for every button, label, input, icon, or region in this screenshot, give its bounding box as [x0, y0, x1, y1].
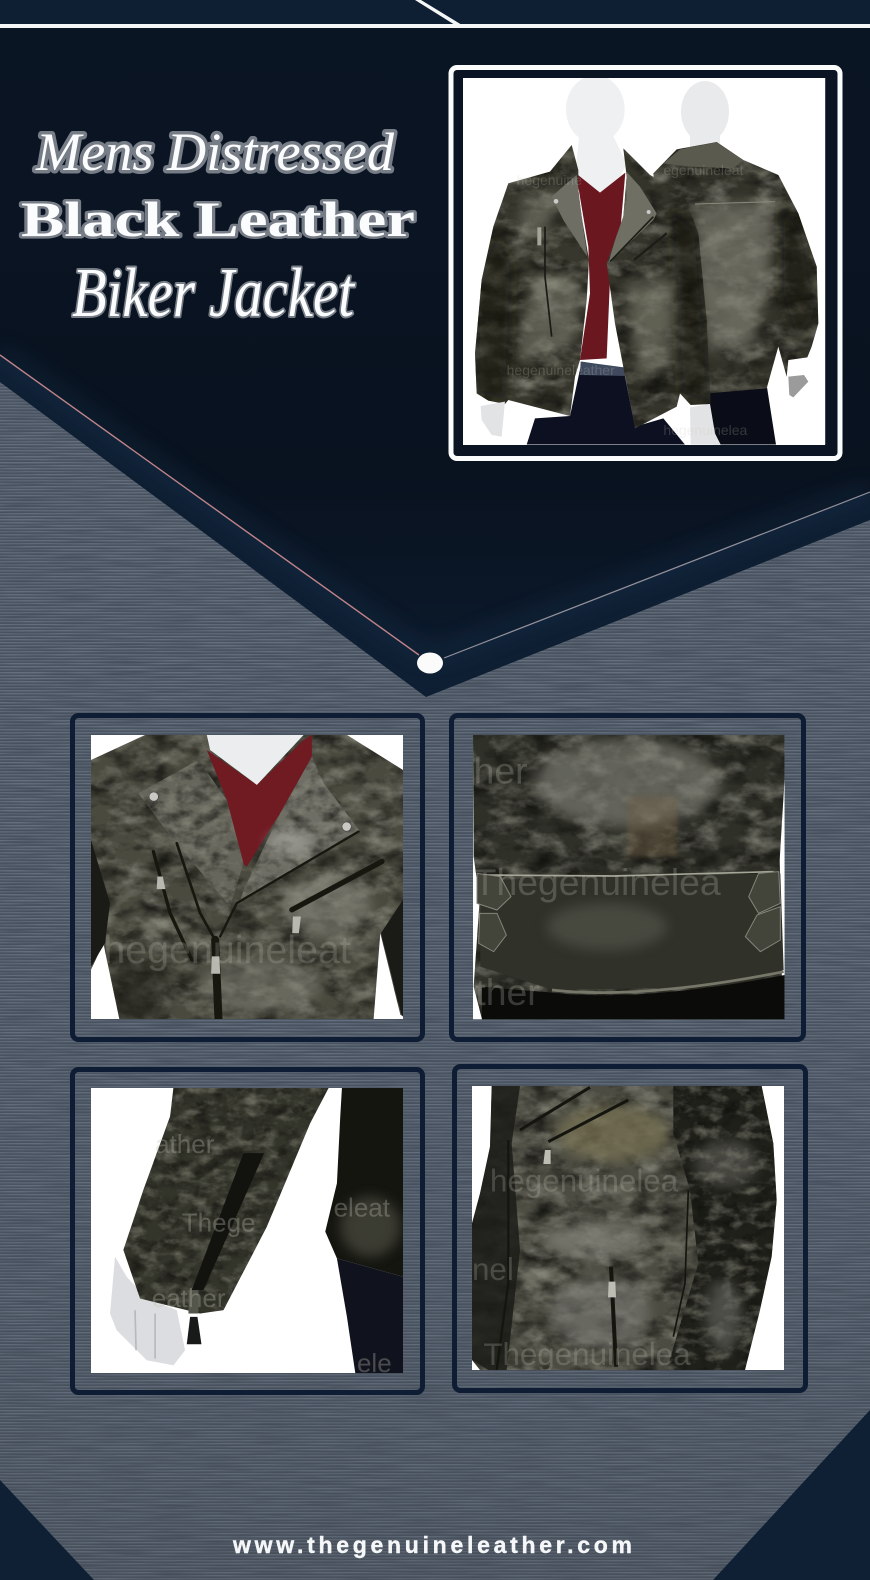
- watermark: hegenuinelea: [490, 1164, 679, 1199]
- rust patch: [627, 797, 677, 857]
- jacket body: [472, 1086, 777, 1370]
- header panel: dark navy chevron: [0, 0, 870, 697]
- front mannequin head: [566, 75, 627, 202]
- title line 2: Black Leather: [21, 191, 415, 247]
- main photo: front and back jacket: [475, 78, 826, 445]
- body shading: [107, 877, 370, 1030]
- right lapel: [240, 757, 360, 900]
- front jeans: [527, 362, 685, 445]
- chest zippers: [497, 1087, 688, 1370]
- jacket side: [325, 1088, 403, 1277]
- hand: [110, 1257, 185, 1365]
- bottom corner: right triangle: [713, 1410, 870, 1580]
- left darker edge: [472, 1086, 520, 1370]
- zip pulls: [157, 877, 301, 974]
- red shirt: [207, 735, 312, 867]
- hem shadow: [482, 975, 785, 1019]
- watermark: Thegenuinelea: [483, 1337, 691, 1372]
- lower highlight: [550, 1277, 650, 1350]
- zip pulls: [543, 1150, 616, 1297]
- back mannequin head: [681, 81, 729, 153]
- back jacket: [653, 142, 818, 393]
- watermark: hegenuinelea: [663, 422, 748, 438]
- olive highlight: [557, 1105, 670, 1162]
- detail frame 4: [454, 1066, 806, 1390]
- red shirt: [576, 173, 625, 360]
- detail frame 2: [452, 716, 804, 1040]
- watermark: hegenuineleather: [507, 362, 615, 378]
- watermark: eather: [152, 1283, 226, 1313]
- zip pull: [187, 1290, 201, 1344]
- stitched line: left: [0, 355, 419, 655]
- title: [21, 122, 415, 332]
- watermark: [472, 1164, 691, 1372]
- seam: [480, 872, 774, 876]
- sleeve: [123, 1088, 329, 1314]
- dark sleeves: [91, 840, 403, 1016]
- watermark: ther: [475, 971, 540, 1013]
- front jacket left panel: [475, 145, 589, 416]
- jacket body: [91, 735, 403, 1019]
- watermark: [152, 1129, 392, 1378]
- detail photo 3: sleeve cuff zip: [91, 1088, 403, 1378]
- detail photo 4: front pocket and sleeve: [472, 1086, 784, 1372]
- main product frame: [451, 68, 840, 458]
- watermark: hegenuineleat: [103, 928, 351, 972]
- detail photo 2: back waist and buckles: [473, 735, 785, 1020]
- highlight: [534, 740, 720, 827]
- right buckles: [745, 872, 780, 952]
- studs: [149, 792, 351, 831]
- watermark: [474, 749, 721, 1013]
- stitched line: right: [444, 492, 870, 658]
- watermark: her: [474, 749, 528, 791]
- watermark: hegenuine: [517, 172, 582, 188]
- watermark: nel: [472, 1252, 514, 1287]
- chest highlight: [543, 1222, 650, 1258]
- neck: [207, 735, 304, 785]
- chevron dot: [417, 652, 443, 674]
- sleeve: [667, 1086, 777, 1370]
- back hand: [788, 375, 808, 397]
- bottom corner: left triangle: [0, 1480, 94, 1580]
- watermark: Thegenuinelea: [474, 861, 721, 903]
- left buckles: [477, 873, 511, 952]
- left lapel: [138, 760, 243, 906]
- leather back: [473, 735, 785, 1019]
- hem: [552, 972, 784, 993]
- jacket side lower highlight: [340, 1197, 400, 1257]
- watermark: egenuineleat: [663, 162, 744, 178]
- website url: www.thegenuineleather.com: [232, 1532, 632, 1558]
- back trousers: [708, 385, 776, 445]
- lower belt: [480, 873, 784, 990]
- watermark: [507, 162, 748, 438]
- front jacket right panel: [607, 148, 711, 428]
- front hands: [481, 402, 721, 445]
- detail frame 1: [72, 716, 422, 1040]
- jeans: [337, 1258, 403, 1373]
- detail frame 3: [72, 1070, 422, 1392]
- detail photo 1: collar and zips: [91, 735, 403, 1019]
- watermark: ather: [155, 1129, 215, 1159]
- sleeve zipper: [192, 1153, 264, 1290]
- watermark: Thege: [182, 1208, 256, 1238]
- title line 3: Biker Jacket: [72, 255, 355, 332]
- watermark: eleat: [334, 1193, 391, 1223]
- watermark: ele: [357, 1348, 392, 1378]
- top bar with white rule: [0, 0, 870, 28]
- title line 1: Mens Distressed: [35, 122, 395, 182]
- zippers: [153, 832, 382, 1019]
